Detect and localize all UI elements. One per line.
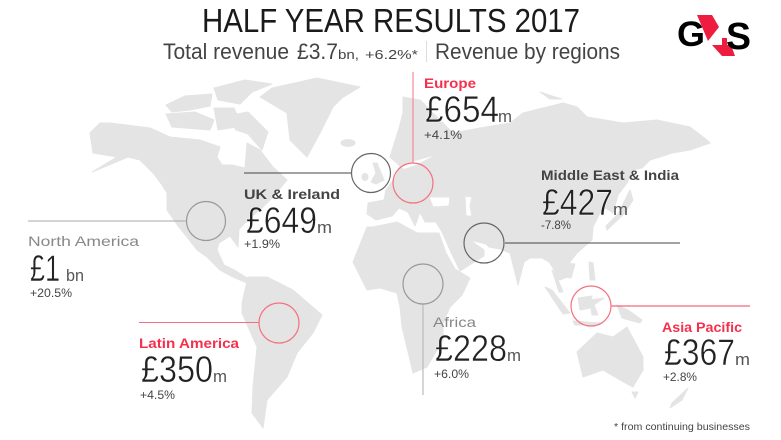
region: Middle East and India: m (613, 200, 628, 219)
Ireland (362, 174, 368, 180)
New Guinea (617, 305, 642, 323)
region: Latin America (139, 303, 299, 402)
region: Latin America: +4.5% (140, 390, 175, 402)
South America (242, 277, 322, 428)
Eurasia (367, 97, 710, 285)
New Zealand (670, 388, 688, 408)
UK (371, 163, 384, 184)
Borneo (578, 296, 592, 310)
logo: G4S: G (677, 15, 705, 54)
logo: G4S (677, 15, 751, 58)
subtitle: total revenue: Total revenue (163, 39, 289, 64)
region: Asia Pacific: +2.8% (663, 372, 697, 384)
world map (90, 78, 710, 428)
region: Middle East and India (464, 168, 680, 263)
region: Europe: m (498, 107, 512, 126)
region: Asia Pacific: m (735, 350, 750, 369)
region: North America: North America (28, 233, 139, 249)
region: Middle East and India: Middle East & India (541, 168, 680, 183)
Australia (577, 327, 643, 387)
Sulawesi (590, 298, 604, 315)
Philippines (589, 262, 595, 280)
region: North America: bn (66, 266, 84, 285)
region: UK and Ireland: +1.9% (244, 239, 280, 251)
region: Europe: £654 (425, 89, 499, 130)
subtitle: total revenue: bn, (338, 47, 359, 62)
region: UK and Ireland: UK & Ireland (244, 187, 340, 202)
subtitle: total revenue (163, 39, 418, 64)
Java (573, 321, 600, 325)
subtitle divider (426, 41, 427, 62)
region: Africa: +6.0% (434, 369, 469, 381)
region: Europe: Europe (424, 76, 477, 91)
region: UK and Ireland (244, 154, 390, 251)
region: Latin America: m (213, 367, 227, 386)
region: Africa: m (507, 346, 521, 365)
subtitle: revenue by regions: Revenue by regions (435, 39, 620, 64)
Greenland (260, 78, 360, 157)
Tasmania (632, 392, 638, 398)
Sumatra and Malay (545, 287, 570, 314)
region: UK and Ireland: m (317, 218, 332, 237)
region: North America: +20.5% (30, 288, 72, 300)
region: North America: £1 (30, 248, 60, 289)
region: Europe: +4.1% (424, 130, 462, 142)
region: Latin America: £350 (141, 349, 213, 390)
Indochina (553, 262, 575, 278)
subtitle: total revenue: £3.7 (297, 39, 338, 64)
North America (90, 123, 287, 283)
region: UK and Ireland: £649 (246, 200, 317, 241)
Russia Arctic islands (540, 92, 562, 99)
title: HALF YEAR RESULTS 2017 (202, 2, 580, 39)
Baltic sea (401, 156, 433, 169)
region: Africa: Africa (433, 314, 476, 330)
region: Middle East and India: £427 (542, 182, 613, 223)
region: Africa: £228 (435, 328, 507, 369)
Africa (353, 222, 470, 373)
subtitle: total revenue: +6.2%* (365, 47, 418, 62)
logo: G4S: S (726, 16, 751, 58)
region: Latin America: Latin America (139, 336, 240, 351)
footnote: * from continuing businesses (614, 421, 750, 433)
region: Europe (393, 72, 512, 203)
region: Asia Pacific: £367 (664, 332, 735, 373)
Arctic islands (166, 94, 212, 112)
region: Africa (403, 264, 521, 395)
Japan (606, 190, 633, 230)
region: Asia Pacific (571, 286, 750, 384)
region: Asia Pacific: Asia Pacific (662, 320, 743, 335)
region: North America (28, 202, 226, 300)
region: Middle East and India: -7.8% (541, 220, 571, 232)
Iceland (341, 140, 355, 146)
